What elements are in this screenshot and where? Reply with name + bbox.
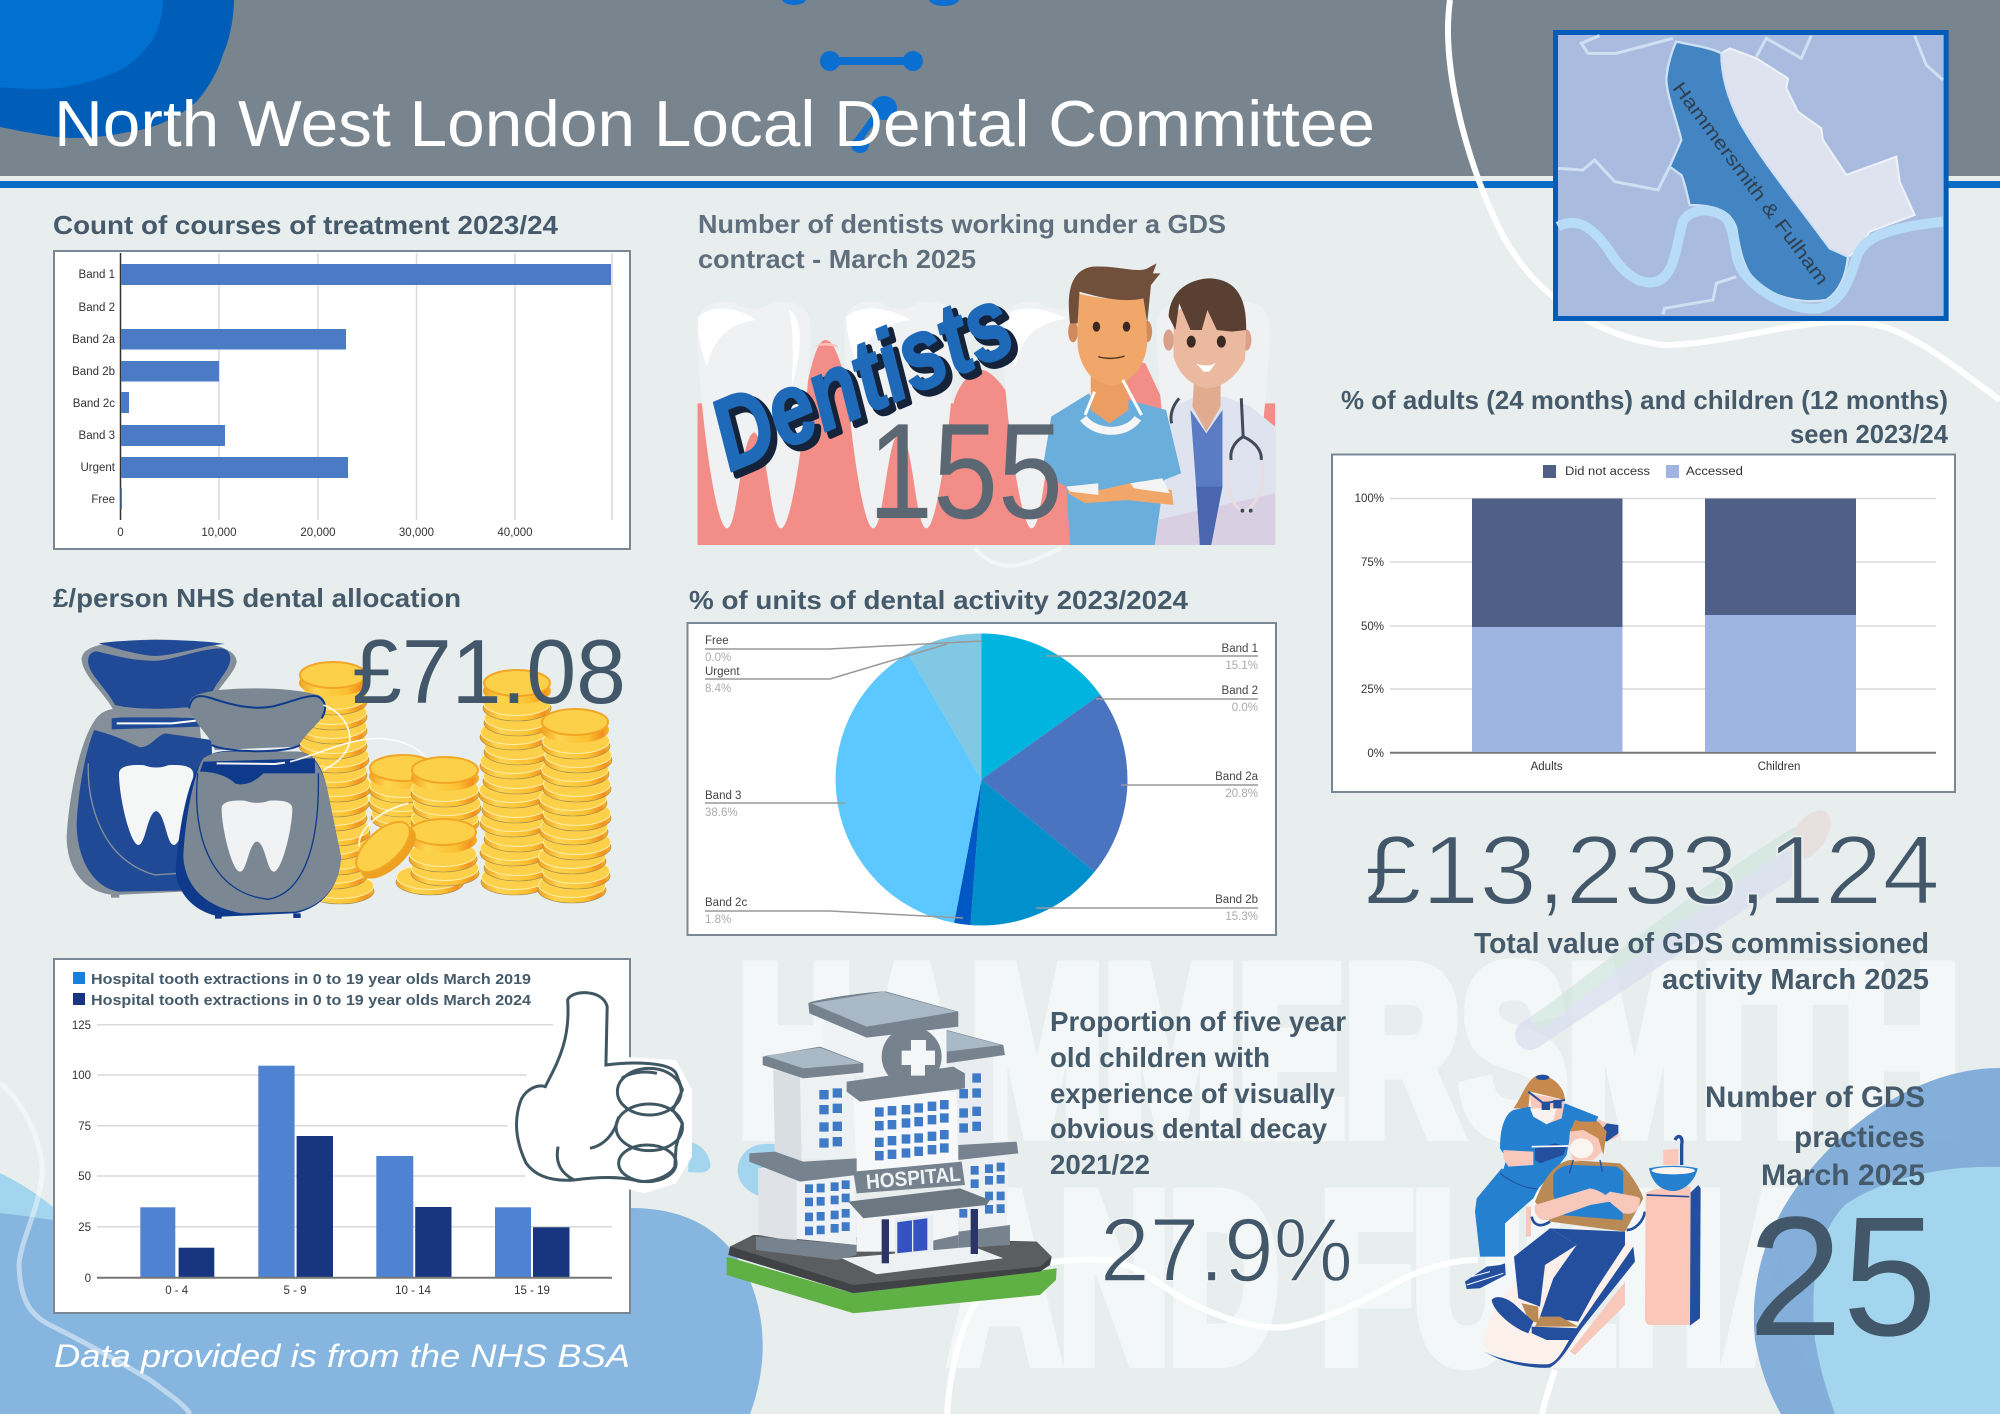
bar chart: hospital tooth extractions: 50 (78, 1171, 91, 1183)
number: total value: £13,233,124 (1364, 815, 1940, 925)
text: five year olds decay label: Proportion of five year (1050, 1006, 1346, 1037)
illustration: floss boxes (67, 639, 341, 919)
text: five year olds decay label: obvious dental decay (1050, 1113, 1327, 1144)
front floss box (176, 688, 341, 919)
dental chair (1483, 1207, 1645, 1368)
text: total value label (1474, 928, 1929, 996)
number: decay percentage: 27.9% (1100, 1201, 1353, 1301)
hospital roofs and bands (749, 991, 1018, 1182)
bar chart: courses of treatment: Band 1 (79, 269, 115, 281)
stacked bar chart: access: 25% (1361, 684, 1384, 696)
patient figure (1492, 1120, 1643, 1340)
coin stack D (479, 670, 552, 895)
pie chart: units of dental activity: 38.6% (705, 807, 738, 819)
bar chart: hospital tooth extractions: 25 (78, 1222, 91, 1234)
bar chart: hospital tooth extractions: 5 - 9 (283, 1285, 307, 1297)
pie chart: units of dental activity: Band 2b (1215, 894, 1258, 906)
pie chart: units of dental activity (688, 623, 1276, 935)
text: five year olds decay label (1050, 1006, 1346, 1180)
heading: allocation: £/person NHS dental allocation (53, 583, 461, 613)
back floss box (67, 639, 237, 898)
text: data source: Data provided is from the NHS BSA (54, 1338, 630, 1374)
bar chart: courses of treatment: Urgent (80, 462, 116, 474)
bar chart: courses of treatment (54, 251, 630, 549)
hospital cross (902, 1040, 935, 1076)
bar chart: hospital tooth extractions (54, 959, 630, 1313)
bar chart: courses of treatment: 20,000 (300, 527, 336, 539)
icon: toothbrush (1530, 803, 1839, 1035)
text: GDS practices label: March 2025 (1761, 1159, 1925, 1192)
illustration: two dentists (1042, 263, 1275, 545)
pie chart: units of dental activity: Band 2c (705, 897, 747, 909)
illustration: Dentists lettering: Dentists (694, 264, 1029, 492)
bar chart: hospital tooth extractions: Hospital tooth extractions in 0 to 19 year olds March 2019 (91, 971, 531, 988)
text: five year olds decay label: old children with (1050, 1042, 1270, 1073)
hospital walls (756, 1022, 1010, 1260)
blob: bottom left (0, 1142, 800, 1414)
dentist figure (1465, 1075, 1618, 1289)
heading: number of dentists: contract - March 2025 (698, 244, 976, 274)
tilted coin (347, 812, 424, 888)
pie chart: units of dental activity: Band 2a (1215, 771, 1259, 783)
header band (0, 0, 2000, 188)
icon: thumbs up (507, 985, 692, 1193)
bar chart: courses of treatment: Band 2c (73, 398, 115, 410)
number: GDS practices: 25 (1748, 1182, 1937, 1372)
hospital base (727, 1235, 1057, 1313)
decorative bones (782, 0, 959, 153)
bar chart: courses of treatment: Free (91, 494, 115, 506)
bar chart: courses of treatment: Band 2a (72, 334, 116, 346)
pie chart: units of dental activity: Urgent (705, 666, 740, 678)
floss thread (290, 705, 425, 847)
stacked bar chart: access (1332, 454, 1955, 792)
pie chart: units of dental activity: 15.1% (1225, 660, 1258, 672)
bar chart: courses of treatment: 0 (117, 527, 124, 539)
coin stack E (538, 709, 612, 903)
male dentist (1042, 263, 1181, 545)
cabinet and basin (1645, 1136, 1701, 1326)
pie chart: units of dental activity: 20.8% (1225, 788, 1258, 800)
heading: adults and children seen: seen 2023/24 (1790, 419, 1949, 449)
pie chart: units of dental activity: Free (705, 635, 729, 647)
pie chart: units of dental activity: 0.0% (705, 652, 731, 664)
bar chart: hospital tooth extractions: 100 (72, 1070, 91, 1082)
illustration: Dentists lettering: Dentists (699, 269, 1034, 497)
hospital sign: HOSPITAL (865, 1163, 962, 1194)
illustration: dentist and patient (1465, 1075, 1701, 1368)
bar chart: hospital tooth extractions: 15 - 19 (514, 1285, 550, 1297)
pie chart: units of dental activity: Band 3 (705, 790, 741, 802)
header blob (0, 0, 234, 138)
map: Hammersmith and Fulham (1555, 32, 1946, 318)
text: total value label: activity March 2025 (1662, 964, 1929, 996)
pie chart: units of dental activity: Band 1 (1222, 643, 1258, 655)
number: allocation per person: £71.08 (352, 622, 626, 723)
bar chart: courses of treatment: 30,000 (399, 527, 434, 539)
illustration: hospital (727, 991, 1057, 1313)
hospital windows (805, 1073, 1005, 1235)
coin stack F (396, 819, 479, 895)
heading: units of dental activity: % of units of dental activity 2023/2024 (689, 585, 1189, 615)
number: dentists 155: 155 (868, 395, 1063, 547)
heading: number of dentists: Number of dentists working under a GDS (698, 209, 1226, 239)
pie chart: units of dental activity: 0.0% (1232, 702, 1258, 714)
stacked bar chart: access: 50% (1361, 621, 1384, 633)
text: total value label: Total value of GDS commissioned (1474, 928, 1929, 960)
bar chart: courses of treatment: 40,000 (497, 527, 533, 539)
pie chart: units of dental activity: 15.3% (1225, 911, 1258, 923)
heading: number of dentists (698, 209, 1226, 274)
text: five year olds decay label: 2021/22 (1050, 1149, 1150, 1180)
bar chart: hospital tooth extractions: 10 - 14 (395, 1285, 432, 1297)
coin stack B (369, 755, 439, 831)
text: GDS practices label: practices (1794, 1121, 1925, 1154)
stacked bar chart: access: Did not access (1565, 466, 1650, 478)
female dentist (1153, 278, 1275, 545)
heading: adults and children seen: % of adults (24 months) and children (12 months) (1341, 385, 1948, 415)
text: GDS practices label: Number of GDS (1705, 1081, 1925, 1114)
blob: bottom right (1754, 1068, 2000, 1414)
pie chart: units of dental activity: 8.4% (705, 683, 731, 695)
stacked bar chart: access: Adults (1531, 761, 1563, 773)
bar chart: hospital tooth extractions: 125 (72, 1020, 91, 1032)
pie chart: units of dental activity: Band 2 (1222, 685, 1258, 697)
bar chart: courses of treatment: Band 2b (72, 366, 115, 378)
stacked bar chart: access: Children (1758, 761, 1800, 773)
stacked bar chart: access: 75% (1361, 557, 1384, 569)
pie chart: units of dental activity: 1.8% (705, 914, 731, 926)
text: GDS practices label (1705, 1081, 1925, 1192)
bar chart: hospital tooth extractions: 0 (85, 1273, 91, 1285)
text: five year olds decay label: experience of visually (1050, 1078, 1335, 1109)
heading: adults and children seen (1341, 385, 1949, 449)
coin stack C (411, 757, 481, 836)
map: Hammersmith and Fulham: Hammersmith & Fulham (1668, 78, 1832, 289)
watermark: Hammersmith and Fulham (738, 919, 1960, 1410)
coin stack A (299, 662, 374, 904)
title: North West London Local Dental Committee (54, 87, 1375, 160)
illustration: gold coin stacks (299, 662, 612, 904)
stacked bar chart: access: 100% (1355, 493, 1384, 505)
illustration: teeth and gums (698, 302, 1275, 545)
stacked bar chart: access: Accessed (1686, 466, 1743, 478)
bar chart: hospital tooth extractions: 0 - 4 (165, 1285, 189, 1297)
bar chart: hospital tooth extractions: 75 (78, 1121, 91, 1133)
bar chart: courses of treatment: Band 3 (79, 430, 115, 442)
heading: courses of treatment: Count of courses of treatment 2023/24 (53, 210, 559, 240)
bar chart: courses of treatment: 10,000 (201, 527, 237, 539)
bar chart: courses of treatment: Band 2 (79, 302, 115, 314)
hospital entrance (842, 1188, 1003, 1274)
bar chart: hospital tooth extractions: Hospital tooth extractions in 0 to 19 year olds March 2024 (91, 992, 532, 1009)
stacked bar chart: access: 0% (1367, 748, 1384, 760)
